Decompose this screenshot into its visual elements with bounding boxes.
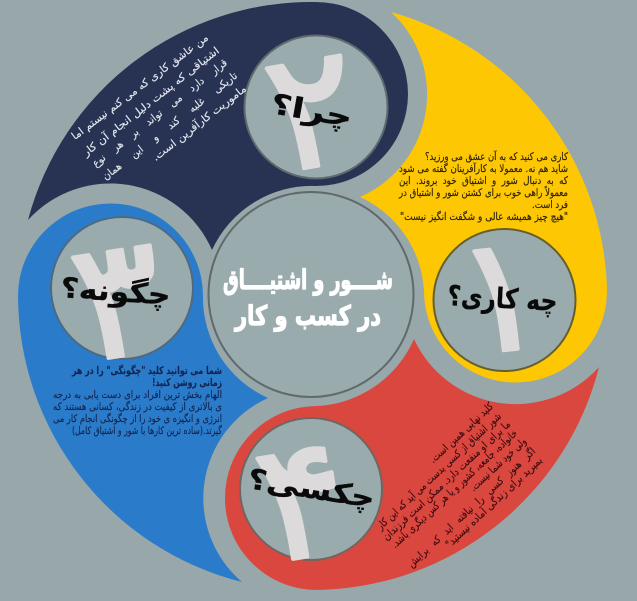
icon: circle with numeral 3: ۳ [59,197,177,400]
panel: blue section how [18,197,268,582]
text block: yellow paragraph: شاید هم نه. معمولا به کارآفرینان گفته می شود [399,162,568,175]
text block: yellow paragraph: معمولاً راهی خوب برای کشتن شور و اشتیاق در [398,185,568,199]
text block: red paragraph: خانواده، جامعه، کشور و یا هر کس دیگری باشد. [388,427,520,551]
text block: yellow paragraph: که به دنبال شور و اشتیاق خود بروند. این [399,175,568,187]
heading: why: چرا؟ [268,87,355,134]
text block: yellow paragraph: فرد است. [532,199,568,211]
text block: blue paragraph: شما می توانید کلید "چگونگی" را در هر [71,364,222,377]
text block: yellow paragraph [398,150,568,223]
text block: navy paragraph: تاریکی غلبه کند و این همان [100,70,240,183]
text block: red paragraph: اگر هنوز کسی را نیافته اید که برایش [405,445,538,570]
text block: red paragraph: ولی خود شما نیست. [467,435,529,494]
title: در کسب و کار [233,301,381,332]
text block: blue paragraph: الهام بخش ترین افراد برای دست یابی به درجه [53,389,222,401]
heading: how: چگونه؟ [60,271,172,312]
icon: circle with numeral 1: ۱ [448,197,553,392]
text block: yellow paragraph: کاری می کنید که به آن عشق می ورزید؟ [425,150,568,163]
text block: navy paragraph: من عاشق کاری که می کنم نیستم اما [69,32,211,143]
text block: navy paragraph: قرار دارد می تواند بر هر نوع [90,57,230,170]
text block: navy paragraph: اشتیاقی که پشت دلیل انجام آن کار [79,44,222,160]
title [223,265,393,332]
text block: blue paragraph: گیرتد.(ساده ترین کارها با شور و اشتیاق کامل) [72,424,222,437]
icon: circle with numeral 4: ۴ [243,398,361,601]
title: شــــور و اشتیــــاق [223,265,393,296]
icon: circle with numeral 2: ۲ [252,7,372,211]
text block: navy paragraph: ماموریت کارآفرین است. [149,82,249,164]
heading: who: چکسی؟ [246,462,377,515]
panel: yellow section what [360,12,607,392]
text block: blue paragraph [53,364,222,437]
text block: blue paragraph: زمانی روشن کنید! [152,377,222,389]
text block: red paragraph: بمیرید برای زندگی آماده نیستید" [443,454,545,550]
text block: red paragraph: ما برای او منفعت دارد. ممکن است فرزندان [381,418,513,543]
heading: what: چه کاری؟ [447,279,558,318]
panel: center circle with main title [208,192,414,397]
text block: yellow paragraph: "هیچ چیز همیشه عالی و شگفت انگیز نیست" [400,210,568,223]
text block: navy paragraph [69,32,249,183]
panel: navy section why [28,2,408,250]
text block: blue paragraph: ی بالاتری از کیفیت در زندگی، کسانی هستند که [53,400,222,413]
text block: blue paragraph: انرژی و انگیزه ی خود را از چگونگی انجام کار می [53,412,222,425]
text block: red paragraph: کلید نهایی همین است. [427,400,496,466]
text block: red paragraph: شور اشتیاق از کسی بدست می آید که این کار [373,410,504,533]
panel: red section who [225,339,599,601]
